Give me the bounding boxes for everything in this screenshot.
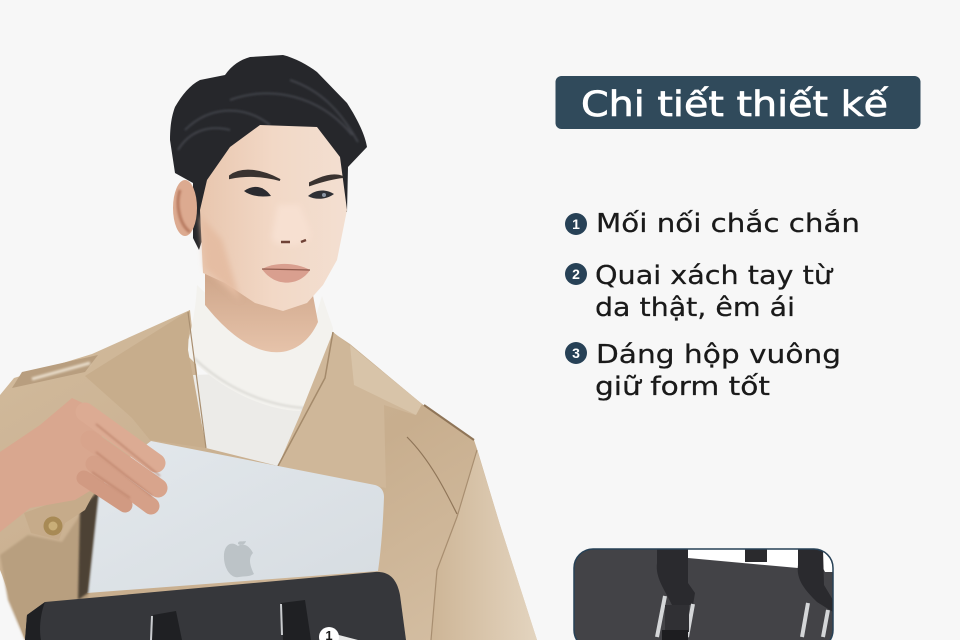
- bag handle left: [151, 611, 182, 640]
- item 2: 2: [572, 266, 580, 282]
- detail photo: bag close-up: [574, 549, 833, 640]
- lips: [262, 264, 310, 283]
- ear: [173, 180, 197, 236]
- item 2: Quai xách tay từ: [595, 261, 834, 291]
- heading: Chi tiết thiết kế: [556, 76, 920, 129]
- coat cuff with button: [24, 487, 97, 540]
- eyes: [244, 187, 271, 196]
- list of design details: [565, 208, 860, 402]
- coat lower left dark panel: [0, 490, 97, 640]
- item 1: Mối nối chắc chắn: [596, 208, 860, 239]
- nose: [272, 205, 310, 246]
- turtleneck collar: [187, 285, 333, 411]
- laptop: [87, 441, 384, 593]
- item 3: [565, 340, 841, 402]
- callout marker 1 on bag: [319, 627, 358, 640]
- item 3: giữ form tốt: [595, 372, 770, 402]
- coat shoulder strap left: [12, 355, 98, 388]
- buckle left: [657, 596, 693, 637]
- item 2: [565, 261, 834, 323]
- hand on laptop: [0, 398, 160, 532]
- background gap behind handles: [688, 549, 800, 568]
- bag: [25, 572, 406, 640]
- buckle right: [802, 603, 828, 637]
- bag handle right: [281, 600, 311, 640]
- front handle right: [798, 549, 833, 612]
- rear handle: [745, 549, 767, 562]
- laptop logo: apple: [224, 541, 254, 577]
- item 1: 1: [572, 216, 580, 232]
- coat body: [0, 310, 537, 640]
- coat sleeve right: [431, 450, 537, 640]
- hair: [170, 55, 367, 250]
- turtleneck lower shirt: [193, 370, 328, 466]
- front handle left: [657, 549, 695, 605]
- item 3: 3: [572, 345, 580, 361]
- fingers: [85, 412, 156, 463]
- coat lapels and collar: [85, 310, 206, 448]
- item 3: Dáng hộp vuông: [596, 340, 841, 370]
- eyebrows: [230, 171, 280, 180]
- model: man in trench coat holding laptop and bag: [0, 55, 537, 640]
- item 2: da thật, êm ái: [595, 293, 795, 323]
- heading: Chi tiết thiết kế: Chi tiết thiết kế: [581, 85, 889, 125]
- neck: [205, 270, 318, 352]
- hand back: [0, 398, 108, 532]
- laptop shadow edge: [78, 490, 99, 600]
- face: [200, 125, 347, 311]
